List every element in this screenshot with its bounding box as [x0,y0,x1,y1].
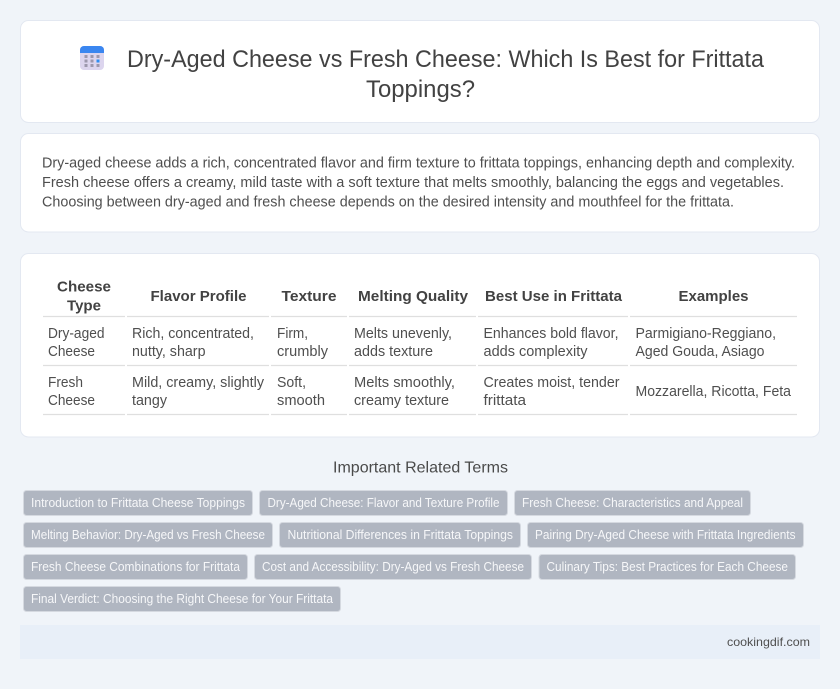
related term chips: Pairing Dry-Aged Cheese with Frittata Ingredients [535,528,796,542]
table row: dry-aged cheese: crumbly [277,344,329,360]
intro text: Choosing between dry-aged and fresh cheese depends on the desired intensity and mouthfeel for the frittata. [42,194,734,211]
table row: dry-aged cheese: adds complexity [484,344,588,360]
table row: fresh cheese [48,375,792,409]
related term chips: Cost and Accessibility: Dry-Aged vs Fresh Cheese [262,560,524,574]
table row: dry-aged cheese: Parmigiano-Reggiano, [636,326,776,342]
related term chips: Culinary Tips: Best Practices for Each Cheese [546,560,788,574]
table header: Best Use in Frittata [485,288,623,305]
table row: fresh cheese: smooth [277,393,325,409]
related term chips: Fresh Cheese: Characteristics and Appeal [522,496,743,510]
table row: dry-aged cheese [48,326,776,360]
table row: dry-aged cheese: Firm, [277,326,308,342]
related term chips: Introduction to Frittata Cheese Toppings [31,496,245,510]
table row: dry-aged cheese: Rich, concentrated, [132,326,254,342]
footer [20,625,820,659]
table row: fresh cheese: Soft, [277,375,306,391]
table row: fresh cheese: creamy texture [354,393,449,409]
panel: header [20,20,820,122]
table row: fresh cheese: Creates moist, tender [484,375,620,391]
table row: fresh cheese: Fresh [48,375,83,391]
table header [57,278,748,314]
table header: Flavor Profile [150,288,246,305]
table row: fresh cheese: Mozzarella, Ricotta, Feta [636,384,792,400]
table row: fresh cheese: Melts smoothly, [354,375,455,391]
related term chips: Final Verdict: Choosing the Right Cheese for Your Frittata [31,592,333,606]
panel: intro [20,134,820,232]
related term chips: Dry-Aged Cheese: Flavor and Texture Profile [268,496,500,510]
intro text [42,155,795,211]
title: Dry-Aged Cheese vs Fresh Cheese: Which Is Best for Frittata [127,46,764,73]
intro text: Dry-aged cheese adds a rich, concentrated flavor and firm texture to frittata toppings, enhancing depth and complexity. [42,155,795,172]
table row: dry-aged cheese: Dry-aged [48,326,104,342]
related term chips: Fresh Cheese Combinations for Frittata [31,560,240,574]
related term chips: Nutritional Differences in Frittata Toppings [288,528,513,542]
table header: Cheese [57,278,111,296]
intro text: Fresh cheese offers a creamy, mild taste with a soft texture that melts smoothly, balancing the eggs and vegetables. [42,174,784,191]
table row: fresh cheese: tangy [132,393,168,409]
table row: fresh cheese: Cheese [48,393,95,409]
table row: dry-aged cheese: Melts unevenly, [354,326,452,342]
table row: fresh cheese: frittata [484,393,527,409]
title: Toppings? [366,76,475,103]
table row: fresh cheese: Mild, creamy, slightly [132,375,265,391]
table header: Examples [678,288,748,305]
table row: dry-aged cheese: Cheese [48,344,95,360]
footer source: cookingdif.com [727,635,810,649]
table row: dry-aged cheese: adds texture [354,344,433,360]
heading: important related terms: Important Related Terms [333,460,508,476]
table header: Type [67,298,101,314]
table header: Melting Quality [358,288,469,305]
icon: calendar [80,46,104,70]
table row: dry-aged cheese: Enhances bold flavor, [484,326,618,342]
table row: dry-aged cheese: nutty, sharp [132,344,206,360]
related term chips [24,490,804,612]
panel: comparison table [20,254,820,437]
related term chips: Melting Behavior: Dry-Aged vs Fresh Cheese [31,528,265,542]
title [127,46,764,103]
table row: dry-aged cheese: Aged Gouda, Asiago [636,344,764,360]
table header: Texture [282,288,336,305]
